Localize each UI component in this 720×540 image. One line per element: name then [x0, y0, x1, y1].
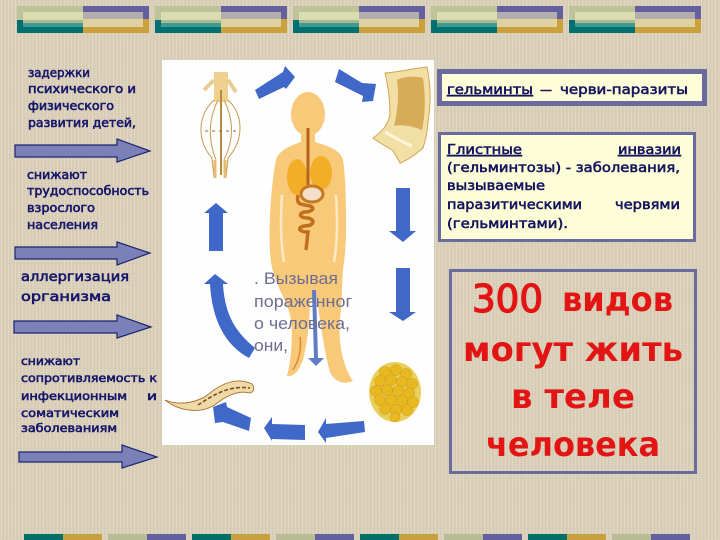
text: reduced resistance: инфекционным [21, 389, 127, 403]
arrow: left 3 [14, 315, 151, 338]
panel: helminth invasions definition: (гельминтозы) - заболевания, [447, 161, 680, 176]
panel: helminth invasions definition: вызываемые [447, 179, 545, 194]
text: delays in development: развития детей, [28, 116, 136, 130]
text: reduced resistance: заболеваниям [21, 421, 117, 435]
text: overlay caption [254, 269, 352, 355]
arrow: cycle left up [204, 203, 228, 251]
text: reduced working capacity: населения [27, 218, 98, 232]
arrow: cycle left curved [204, 274, 255, 358]
text: reduced resistance [21, 354, 157, 435]
panel: helminth invasions definition [440, 134, 694, 240]
text: delays in development: задержки [28, 66, 90, 80]
text: overlay caption: пораженног [254, 292, 352, 311]
panel: 300 species callout: человека [486, 425, 660, 465]
text: allergization: аллергизация [21, 270, 129, 285]
text: reduced resistance: и [147, 389, 157, 403]
panel: parasite life cycle [162, 60, 434, 445]
text: overlay caption: о человека, [254, 314, 350, 333]
text: reduced working capacity: снижают [27, 168, 87, 182]
top decorative band [17, 6, 701, 33]
panel: 300 species callout: видов [562, 280, 673, 320]
text: reduced resistance: соматическим [21, 406, 119, 420]
text: reduced working capacity: трудоспособность [27, 184, 149, 198]
text: delays in development: психического и [28, 82, 136, 96]
panel: helminths definition: черви-паразиты [560, 83, 688, 98]
arrow: cycle top left [255, 66, 295, 99]
panel: helminth invasions definition: инвазии [618, 143, 681, 158]
text: allergization: организма [21, 290, 111, 305]
text: reduced resistance: сопротивляемость к [21, 371, 157, 385]
panel: helminth invasions definition: (гельминтами). [447, 217, 568, 232]
panel: helminths definition: гельминты [447, 83, 533, 98]
text: reduced resistance: снижают [21, 354, 80, 368]
arrow: cycle bottom middle [264, 417, 305, 441]
arrow: left 2 [15, 242, 150, 265]
panel: 300 species callout [450, 270, 696, 472]
text: reduced working capacity: взрослого [27, 201, 95, 215]
text: overlay caption: . Вызывая [254, 269, 338, 288]
bottom decorative band [24, 534, 690, 540]
text: reduced working capacity [27, 168, 149, 232]
panel: 300 species callout: 300 [472, 277, 543, 321]
arrow: cycle bottom left [213, 402, 251, 431]
arrow: left 1 [15, 139, 150, 162]
panel: helminth invasions definition: Глистные [447, 143, 522, 158]
panel: 300 species callout: могут жить [463, 330, 683, 370]
panel: helminths definition: — [540, 83, 552, 98]
text: allergization [21, 270, 129, 305]
panel: helminth invasions definition: червями [615, 198, 680, 213]
arrow: cycle bottom right [318, 418, 365, 443]
arrow: cycle top right [335, 69, 376, 102]
icon: nerve-like worm cross-section [201, 72, 240, 178]
arrow: cycle right down 2 [389, 268, 416, 321]
icon: adult worm [165, 381, 254, 410]
text: overlay caption: они, [254, 336, 288, 355]
icon: intestine section [373, 67, 430, 163]
text: delays in development: физического [28, 99, 114, 113]
arrow: cycle right down 1 [389, 188, 416, 242]
human body figure [270, 92, 353, 383]
panel: helminth invasions definition: паразитическими [447, 198, 582, 213]
text: delays in development [28, 66, 136, 130]
panel: 300 species callout: в теле [511, 377, 635, 417]
internal organs [287, 128, 332, 370]
icon: egg cluster [369, 362, 421, 422]
arrow: left 4 [19, 445, 157, 468]
panel: helminths definition [440, 72, 704, 104]
arrow: thin center arrow [308, 290, 324, 366]
